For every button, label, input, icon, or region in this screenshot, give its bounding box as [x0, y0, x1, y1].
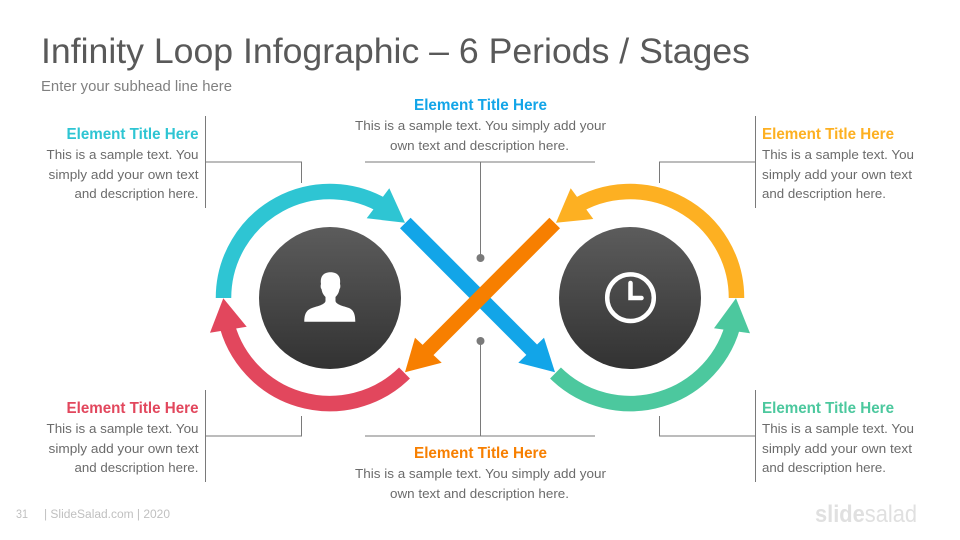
icon: clock	[607, 274, 654, 321]
connector: top right	[660, 116, 756, 208]
text block: top right: This is a sample text. You	[762, 147, 914, 162]
text block: top right: Element Title Here	[762, 126, 894, 143]
connector: top left	[206, 116, 302, 208]
text block: top left: and description here.	[74, 186, 198, 201]
text block: bottom left: and description here.	[74, 460, 198, 475]
text block: top right: simply add your own text	[762, 167, 912, 182]
title: Infinity Loop Infographic – 6 Periods / Stages	[41, 32, 750, 71]
subtitle: Enter your subhead line here	[41, 78, 232, 95]
text block: bottom right	[762, 400, 914, 475]
text block: top centre: This is a sample text. You simply add your	[355, 118, 607, 133]
text block: bottom right: simply add your own text	[762, 441, 912, 456]
connector: bottom left	[206, 390, 302, 482]
text block: top left: Element Title Here	[66, 126, 199, 143]
connector: bottom right	[660, 390, 756, 482]
text block: bottom left: Element Title Here	[66, 400, 199, 417]
text block: bottom centre: This is a sample text. You simply add your	[355, 466, 607, 481]
footer: page number: 31	[16, 509, 28, 521]
text block: bottom right: and description here.	[762, 460, 886, 475]
text block: bottom centre	[355, 445, 607, 501]
connector: bottom centre	[365, 337, 595, 436]
text block: top left	[46, 126, 199, 201]
icon: person	[304, 272, 355, 322]
footer: credit: | SlideSalad.com | 2020	[44, 509, 170, 521]
circle: right clock	[559, 227, 701, 369]
text block: top centre: own text and description here.	[390, 138, 569, 153]
connector: top centre	[365, 162, 595, 262]
text block: bottom right: Element Title Here	[762, 400, 894, 417]
text block: bottom left: This is a sample text. You	[46, 421, 198, 436]
arrow: red arc	[210, 298, 404, 404]
text block: top centre: Element Title Here	[414, 97, 547, 114]
infinity loop diagram	[210, 188, 750, 404]
arrow: blue diagonal	[405, 223, 555, 372]
arrow: green arc	[556, 298, 750, 404]
arrow: teal arc	[224, 188, 405, 298]
text block: bottom centre: Element Title Here	[414, 445, 547, 462]
text block: bottom right: This is a sample text. You	[762, 421, 914, 436]
text block: top left: This is a sample text. You	[46, 147, 198, 162]
arrow: orange diagonal	[405, 223, 555, 372]
text block: top centre	[355, 97, 607, 153]
text block: bottom centre: own text and description here.	[390, 486, 569, 501]
logo: slidesalad: slidesalad	[815, 501, 917, 528]
arrow: yellow arc	[556, 188, 736, 298]
text block: bottom left: simply add your own text	[48, 441, 199, 456]
text block: top right: and description here.	[762, 186, 886, 201]
text block: bottom left	[46, 400, 199, 475]
text block: top left: simply add your own text	[48, 167, 199, 182]
text block: top right	[762, 126, 914, 201]
circle: left person	[259, 227, 401, 369]
